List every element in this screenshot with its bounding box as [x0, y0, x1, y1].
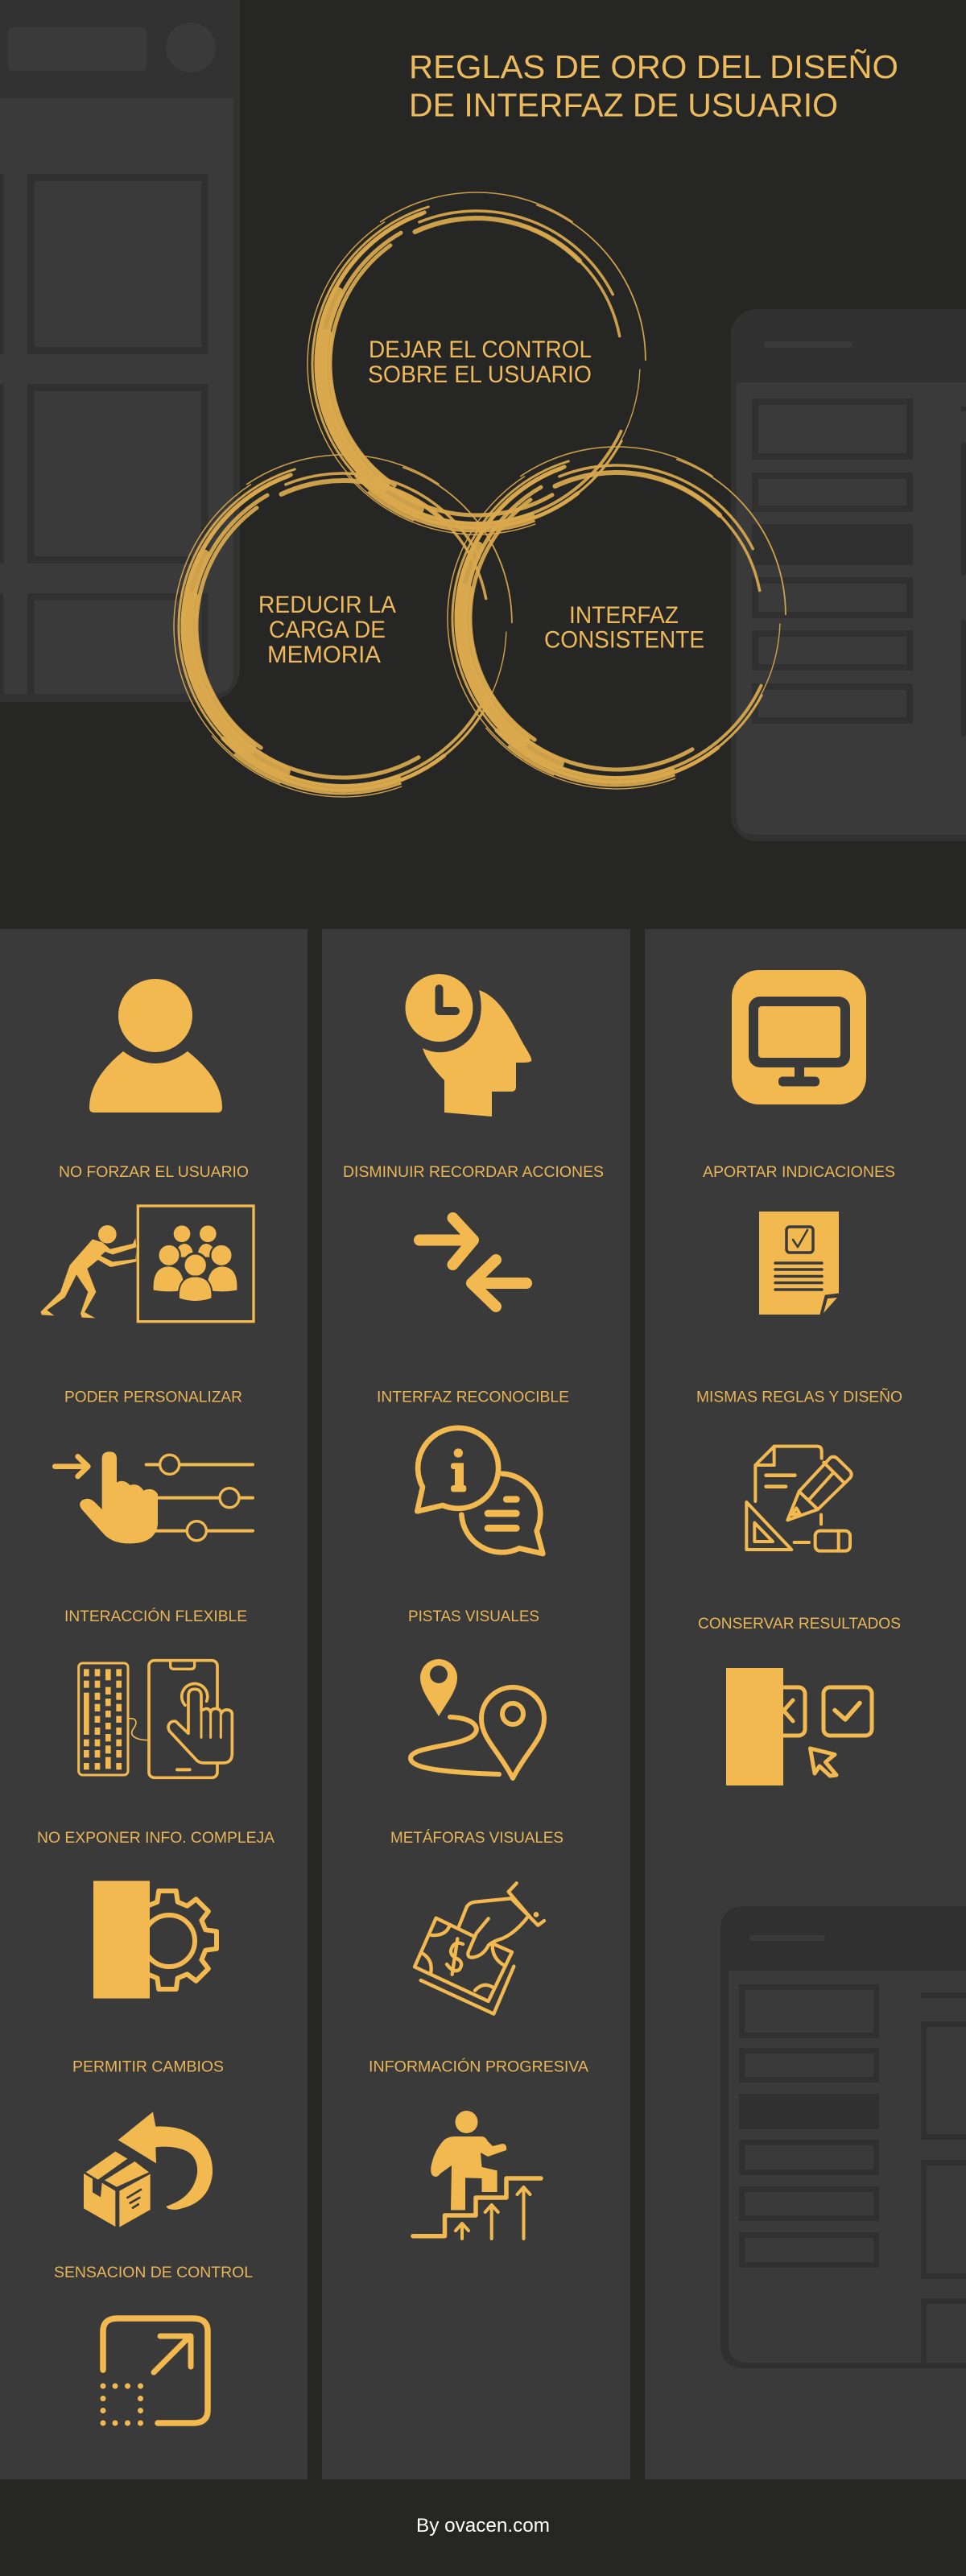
icon: person climbing stairs: [413, 2111, 541, 2239]
label: mismas reglas y diseño: MISMAS REGLAS Y DISEÑO: [696, 1388, 902, 1406]
icon: head with clock: [406, 974, 531, 1117]
icon: document with check: [759, 1212, 839, 1315]
icon: gear behind block: [93, 1880, 217, 1998]
label: sensacion de control: SENSACION DE CONTROL: [54, 2264, 253, 2281]
icon: chat bubbles: [417, 1428, 543, 1554]
icon: box with return arrow: [84, 2112, 213, 2227]
footer: By ovacen.com: [416, 2515, 550, 2537]
icon: choice boxes with cursor: [726, 1668, 872, 1785]
label: pistas visuales: PISTAS VISUALES: [408, 1608, 539, 1625]
wireframe: right phone: [731, 309, 966, 841]
icon: map pins and route: [411, 1659, 544, 1778]
label: poder personalizar: PODER PERSONALIZAR: [64, 1389, 242, 1406]
footer: [0, 2479, 966, 2576]
label: no forzar el usuario: NO FORZAR EL USUARIO: [59, 1164, 249, 1181]
label: conservar resultados: CONSERVAR RESULTADOS: [698, 1616, 901, 1633]
label: permitir cambios: PERMITIR CAMBIOS: [72, 2059, 224, 2075]
circle: dejar el control: [238, 126, 715, 602]
panel: left column: [0, 929, 308, 2479]
label: no exponer info. compleja: NO EXPONER INFO. COMPLEJA: [37, 1830, 275, 1847]
title: REGLAS DE ORO DEL DISEÑO: [409, 48, 898, 85]
icon: monitor: [732, 970, 866, 1104]
panel: middle column: [322, 929, 630, 2479]
label: interfaz reconocible: INTERFAZ RECONOCIBLE: [377, 1389, 569, 1406]
title: DE INTERFAZ DE USUARIO: [409, 87, 838, 124]
wireframe: bottom right phone: [720, 1906, 966, 2368]
label: interacción flexible: INTERACCIÓN FLEXIBLE: [64, 1608, 247, 1625]
circle: reducir la carga de memoria: MEMORIA: [267, 642, 381, 668]
circle: interfaz consistente: [378, 380, 855, 857]
circle: reducir la carga de memoria: CARGA DE: [269, 617, 386, 643]
circle: dejar el control: DEJAR EL CONTROL: [369, 336, 592, 363]
circle: interfaz consistente: INTERFAZ: [569, 602, 679, 629]
icon: resize square: [100, 2318, 208, 2426]
icon: user: [89, 979, 222, 1113]
icon: opposing arrows: [419, 1218, 526, 1307]
title: [409, 48, 898, 124]
icon: hand with sliders: [55, 1451, 253, 1543]
icon: keyboard and phone: [79, 1661, 232, 1777]
icon: hand with money: [415, 1883, 544, 2014]
circle: dejar el control: SOBRE EL USUARIO: [368, 361, 592, 388]
label: disminuir recordar acciones: DISMINUIR RECORDAR ACCIONES: [343, 1164, 604, 1181]
label: aportar indicaciones: APORTAR INDICACIONES: [703, 1164, 895, 1181]
label: metáforas visuales: METÁFORAS VISUALES: [390, 1830, 564, 1847]
icon: design tools: [746, 1447, 852, 1551]
circle: interfaz consistente: CONSISTENTE: [544, 626, 704, 654]
circle: reducir la carga de memoria: REDUCIR LA: [258, 592, 396, 618]
label: información progresiva: INFORMACIÓN PROGRESIVA: [369, 2058, 588, 2075]
panel: right column: [645, 929, 966, 2479]
icon: man pushing group box: [41, 1206, 254, 1322]
circle: reducir la carga de memoria: [105, 388, 581, 865]
wireframe: left phone: [0, 0, 240, 702]
